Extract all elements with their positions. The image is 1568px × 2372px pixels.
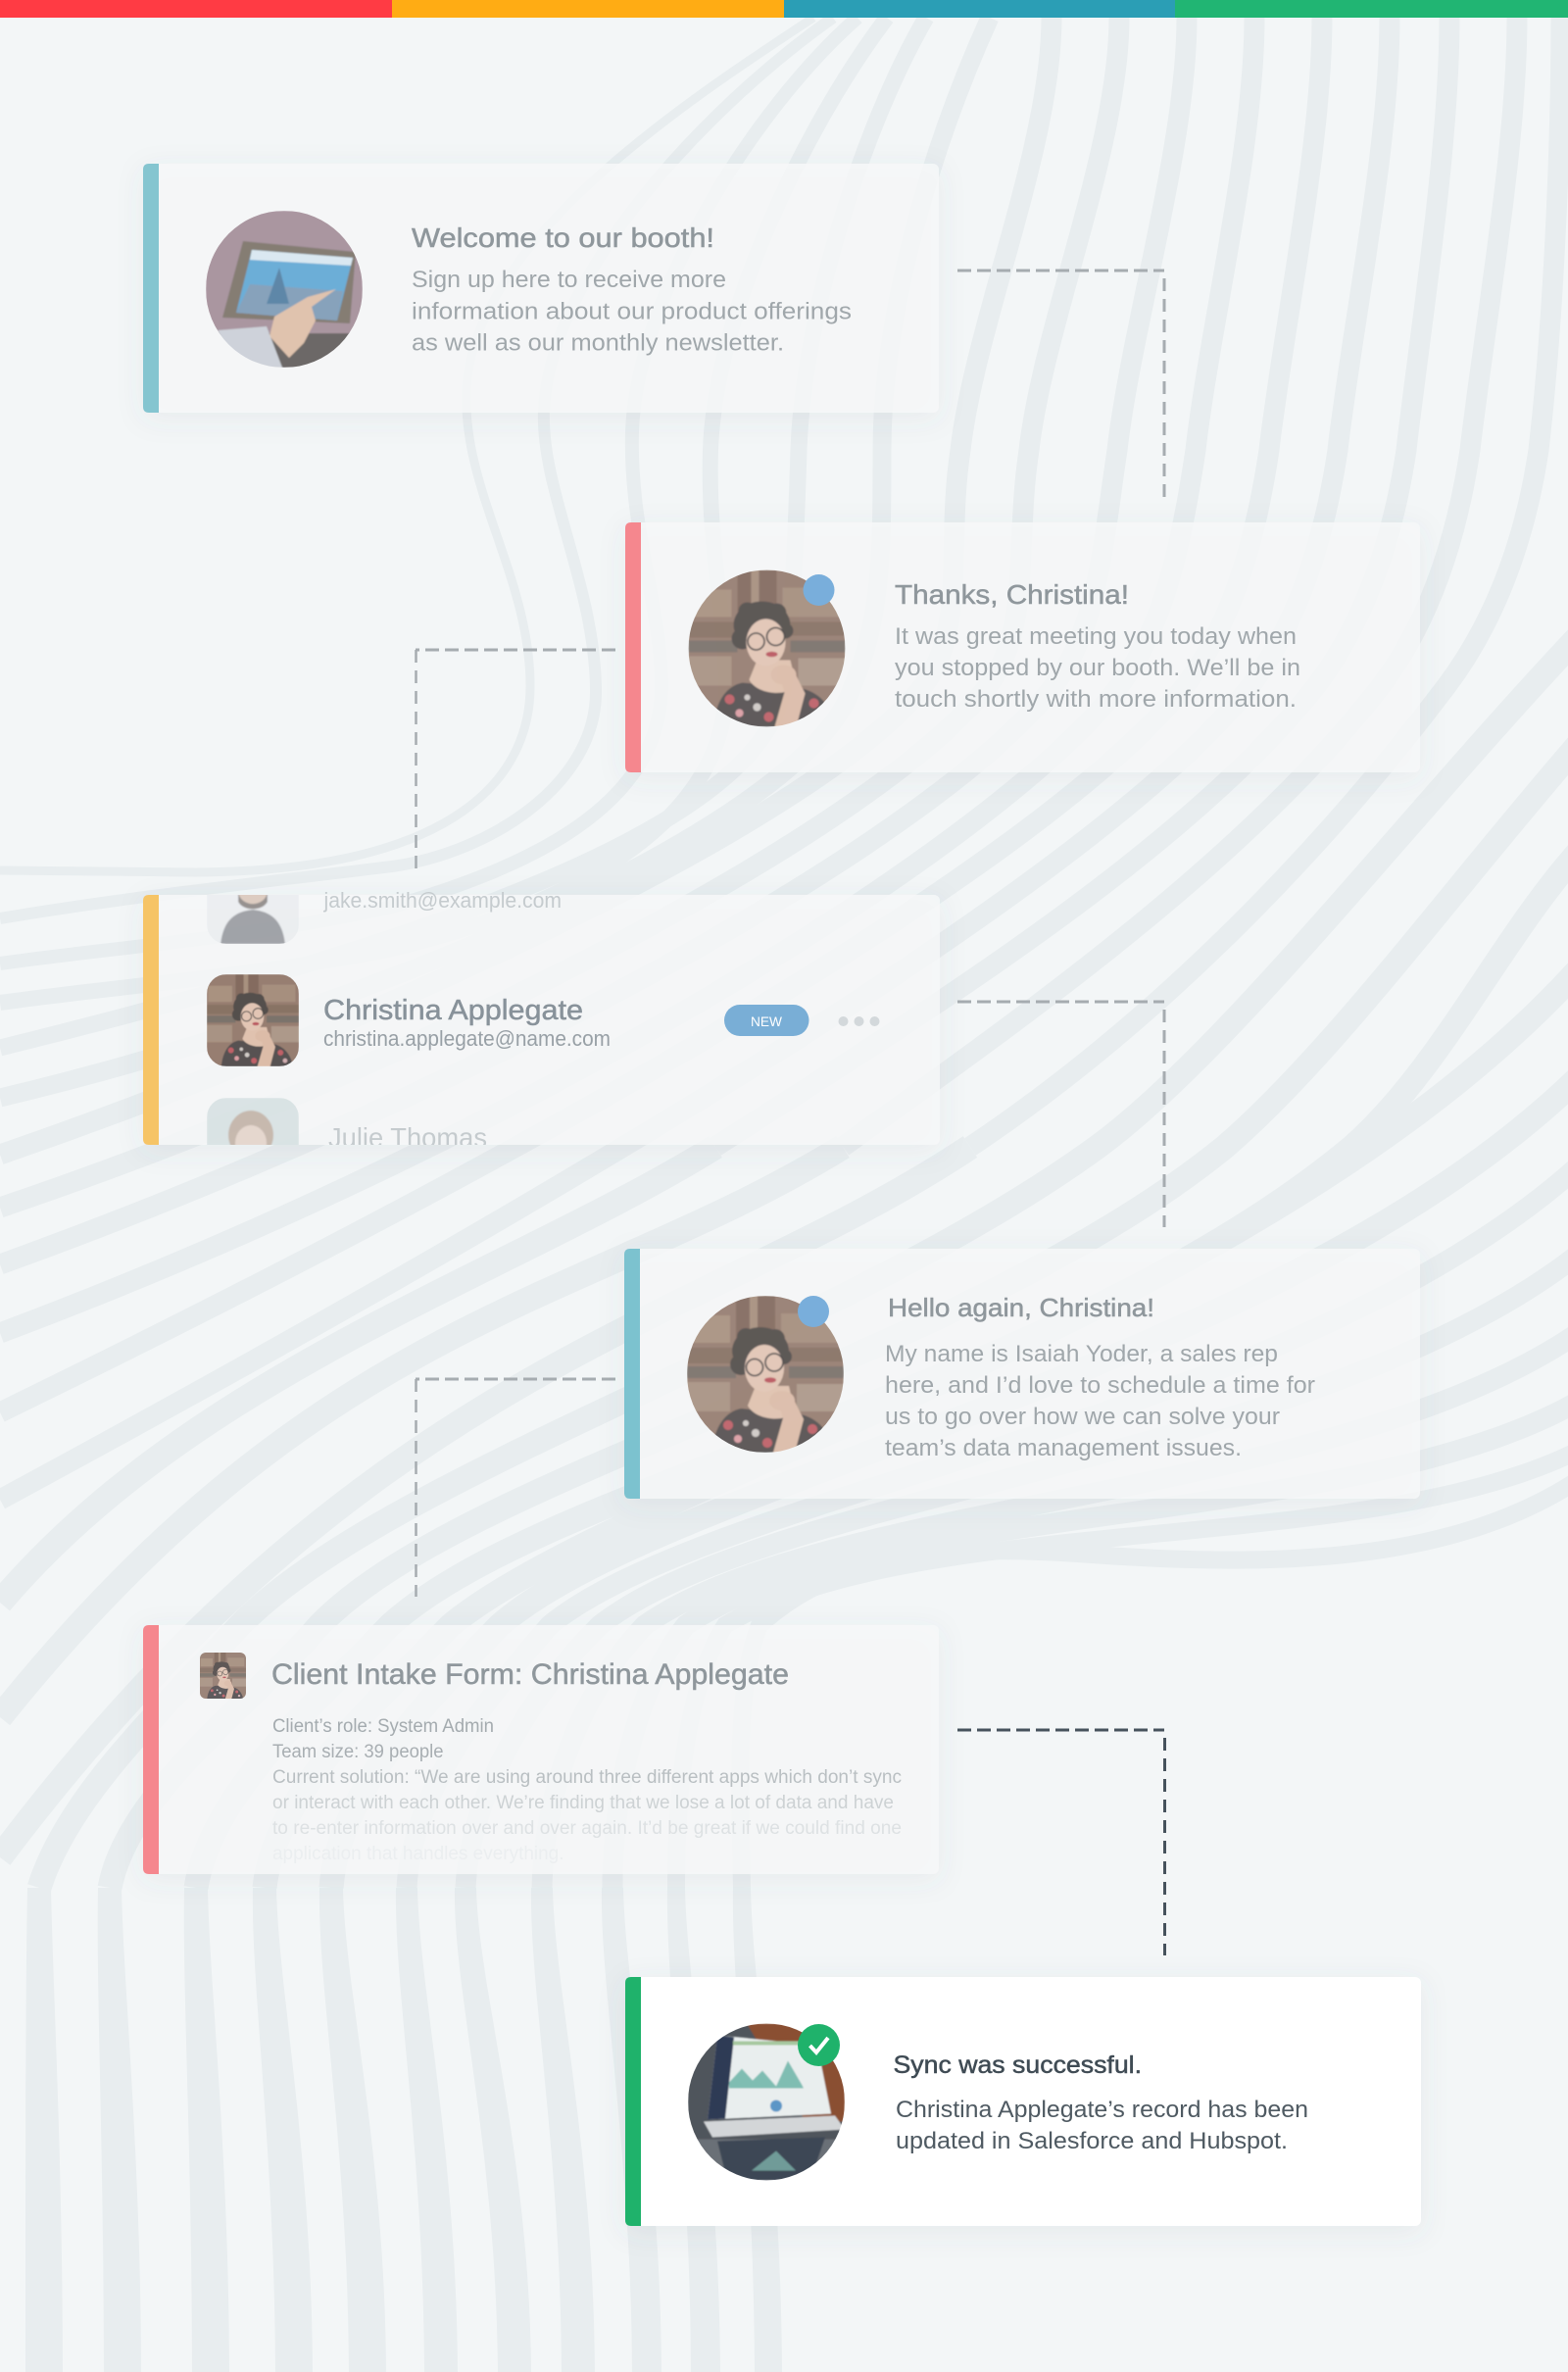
accent bar: [143, 895, 159, 1145]
contact row: Jake: jake.smith@example.com: [323, 888, 562, 913]
form details: to re-enter information over and over again. It’d be great if we could find one: [272, 1818, 902, 1839]
card body: updated in Salesforce and Hubspot.: [896, 2128, 1288, 2154]
form details: or interact with each other. We’re finding that we lose a lot of data and have: [272, 1793, 894, 1813]
card body: here, and I’d love to schedule a time for: [885, 1372, 1315, 1399]
background: wave stripes, lower fan: [25, 1888, 782, 2372]
accent bar: [143, 164, 159, 413]
top colour bar: [0, 0, 1568, 18]
connector: card 1 to card 2: [957, 271, 1164, 497]
contact row: Christina: [207, 974, 880, 1066]
card title: Welcome to our booth!: [412, 222, 714, 253]
success badge: [798, 2024, 840, 2066]
background: wave stripes: [0, 18, 1568, 1888]
panel: thanks card: [625, 522, 1420, 772]
accent bar: [625, 522, 641, 772]
contact row: Julie: Julie Thomas: [328, 1122, 487, 1153]
panel: welcome card: [143, 164, 939, 413]
card body: [412, 267, 852, 357]
form title: Client Intake Form: Christina Applegate: [271, 1658, 789, 1691]
new badge: NEW: [751, 1013, 783, 1029]
card body: you stopped by our booth. We’ll be in: [895, 655, 1300, 681]
card title: Hello again, Christina!: [888, 1293, 1154, 1322]
panel: client intake form card: [143, 1625, 939, 1874]
card body: Christina Applegate’s record has been: [896, 2097, 1308, 2123]
card body: team’s data management issues.: [885, 1435, 1242, 1461]
card body: [885, 1341, 1315, 1461]
card body: as well as our monthly newsletter.: [412, 329, 784, 357]
card body: My name is Isaiah Yoder, a sales rep: [885, 1341, 1278, 1367]
accent bar: [143, 1625, 159, 1874]
card title: Thanks, Christina!: [895, 579, 1129, 610]
panel: hello again card: [624, 1249, 1420, 1499]
photo: Christina: [688, 570, 845, 727]
card body: [896, 2097, 1308, 2154]
accent bar: [625, 1977, 641, 2226]
status dot: [804, 574, 835, 606]
card body: us to go over how we can solve your: [885, 1404, 1280, 1430]
more menu dots: [839, 1016, 880, 1026]
contact row: Christina: Christina Applegate: [323, 995, 583, 1026]
accent bar: [624, 1249, 640, 1499]
form details: application that handles everything.: [272, 1844, 564, 1864]
card body: information about our product offerings: [412, 298, 852, 325]
connector: card 3 to card 4: [957, 1002, 1164, 1227]
connector: card 2 to card 3: [416, 650, 615, 868]
form details: Client’s role: System Admin: [272, 1716, 494, 1737]
contact row: Christina: christina.applegate@name.com: [323, 1026, 611, 1051]
photo: Christina thumbnail: [200, 1653, 246, 1699]
contact row: Julie: [207, 1098, 486, 1145]
panel: contact list card: [143, 892, 940, 1145]
photo: laptop dashboard: [688, 2023, 845, 2180]
photo: Christina: [687, 1296, 844, 1453]
card title: Sync was successful.: [894, 2051, 1142, 2079]
status dot: [798, 1296, 829, 1327]
card body: It was great meeting you today when: [895, 623, 1297, 650]
form details: [272, 1716, 902, 1864]
photo: hand on tablet: [206, 211, 363, 368]
form details: Current solution: “We are using around three different apps which don’t sync: [272, 1767, 902, 1788]
connector: card 5 to card 6: [957, 1730, 1164, 1955]
contact row: Jake: [208, 892, 561, 944]
card body: touch shortly with more information.: [895, 686, 1297, 713]
form details: Team size: 39 people: [272, 1742, 443, 1762]
panel: sync success card: [625, 1977, 1421, 2226]
card body: Sign up here to receive more: [412, 267, 726, 293]
new badge: [724, 1005, 809, 1036]
card body: [895, 623, 1300, 713]
connector: card 4 to card 5: [416, 1379, 615, 1597]
